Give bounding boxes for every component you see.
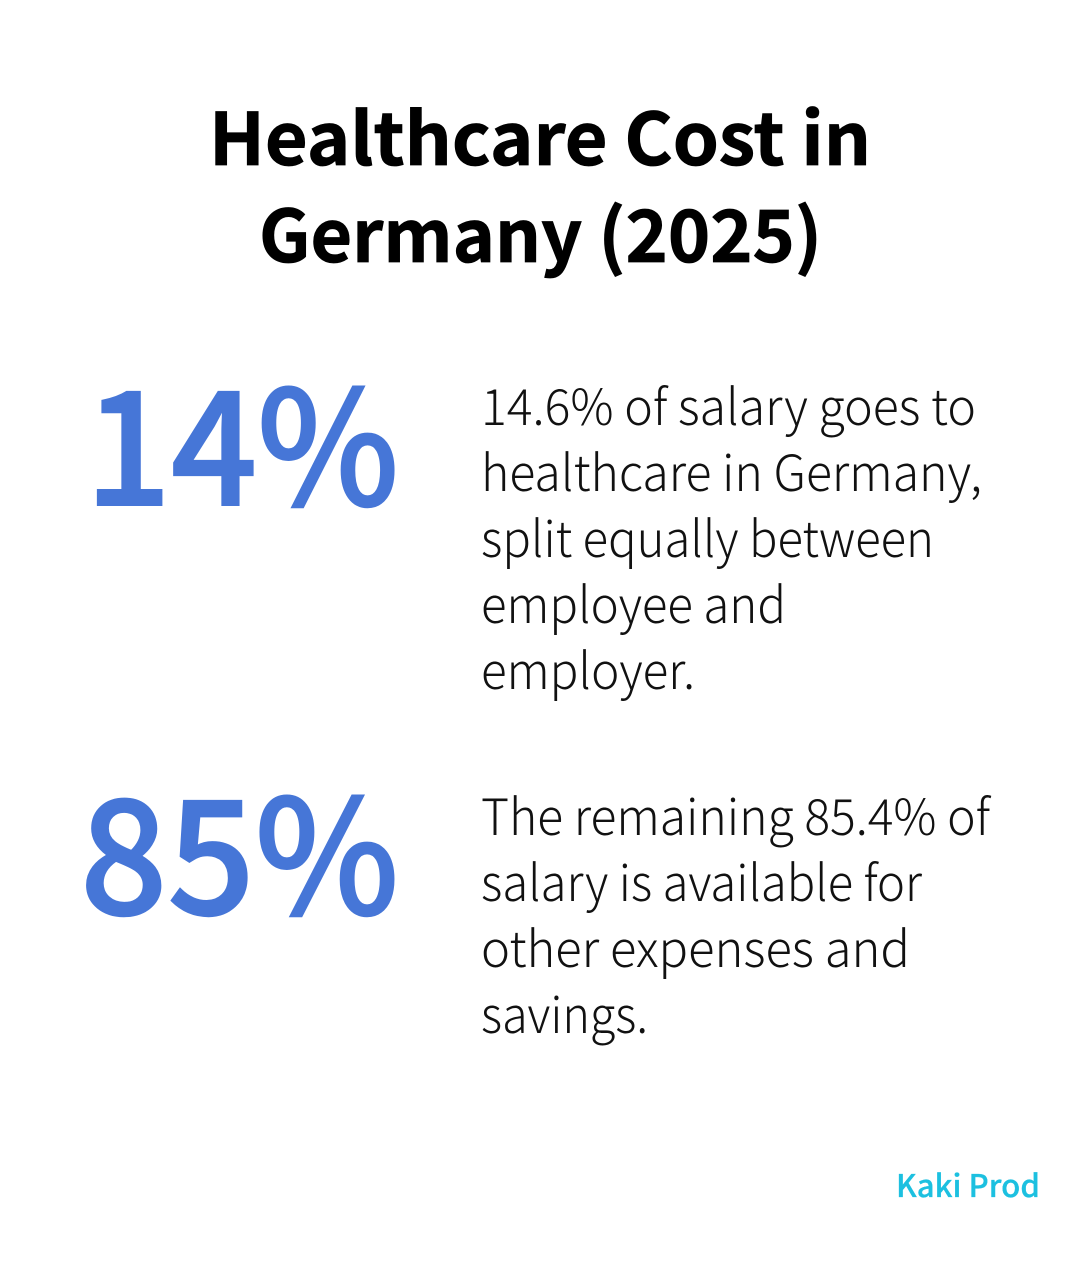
panel: 85 percent stat xyxy=(80,731,992,1048)
panel: 14 percent stat xyxy=(85,322,982,704)
big number: 14%: 14% xyxy=(85,322,399,551)
text block: 14.6% description: split equally between xyxy=(481,500,934,572)
text block: 14.6% description: healthcare in Germany, xyxy=(481,434,982,506)
text block: 14.6% description: employee and xyxy=(481,566,786,638)
text block: 85.4% description: savings. xyxy=(481,976,648,1048)
title: Healthcare Cost in xyxy=(209,81,871,186)
big number: 85%: 85% xyxy=(80,731,399,960)
logo: Kaki Prod: Kaki Prod xyxy=(896,1161,1040,1206)
text block: 14.6% description: 14.6% of salary goes to xyxy=(481,368,976,440)
text block: 14.6% description: employer. xyxy=(481,632,695,704)
text block: 85.4% description xyxy=(481,778,992,1048)
text block: 14.6% description xyxy=(481,368,982,704)
text block: 85.4% description: salary is available for xyxy=(481,844,923,916)
title: Germany (2025) xyxy=(259,178,822,283)
title xyxy=(209,81,871,283)
text block: 85.4% description: other expenses and xyxy=(481,910,910,982)
text block: 85.4% description: The remaining 85.4% of xyxy=(481,778,992,850)
